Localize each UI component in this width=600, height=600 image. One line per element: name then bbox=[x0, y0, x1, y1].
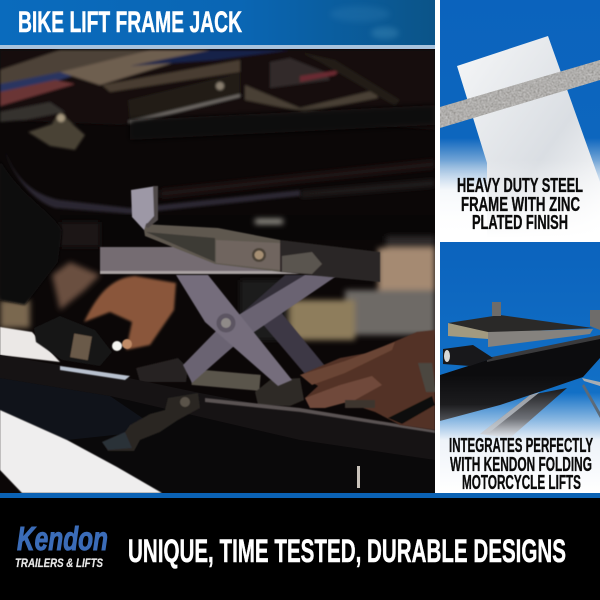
white panel dividers bbox=[435, 0, 440, 493]
lift rail bbox=[0, 355, 435, 493]
logo: Kendon Trailers & Lifts: Kendon bbox=[17, 520, 108, 557]
motorcycle underside bbox=[0, 50, 435, 150]
frame tubes bbox=[130, 105, 435, 198]
jack rear legs bbox=[200, 275, 330, 380]
blue divider bar bbox=[0, 493, 600, 498]
screw and end caps bbox=[136, 358, 304, 406]
dark left mass bbox=[0, 160, 62, 305]
title: BIKE LIFT FRAME JACK bbox=[18, 6, 242, 39]
black fairing curve bbox=[5, 150, 300, 214]
clamp latch bbox=[102, 393, 200, 451]
logo: Kendon Trailers & Lifts: TRAILERS & LIFTS bbox=[15, 556, 103, 570]
spring bbox=[245, 85, 378, 112]
white floor foreground bbox=[0, 410, 162, 493]
jack L bracket bbox=[131, 186, 157, 230]
flashlight bbox=[34, 316, 132, 366]
chrome right bbox=[270, 58, 330, 88]
header banner bbox=[0, 0, 435, 49]
white separator between panels bbox=[440, 238, 600, 242]
shadow below frame bbox=[60, 215, 435, 240]
background beyond lift bbox=[0, 219, 435, 340]
icon: steel plate bbox=[457, 36, 600, 238]
caption: steel frame bbox=[457, 175, 583, 234]
right hand bbox=[300, 330, 436, 430]
panel: lift integration bbox=[440, 242, 600, 494]
icon: zinc plated steel strip bbox=[440, 60, 600, 128]
panel: main photo of frame jack on lift bbox=[0, 49, 436, 493]
icon: jack on folding lift bbox=[440, 302, 600, 438]
small highlight on rail bbox=[357, 466, 360, 488]
jack scissor legs bbox=[176, 275, 338, 386]
floor bbox=[0, 327, 60, 362]
logo: Kendon Trailers & Lifts bbox=[15, 520, 108, 570]
jack top plate bbox=[100, 186, 380, 282]
left hand bbox=[84, 276, 176, 350]
caption: lift integration bbox=[449, 435, 593, 494]
engine parts bbox=[28, 112, 85, 150]
panel: steel finish bbox=[440, 0, 600, 238]
